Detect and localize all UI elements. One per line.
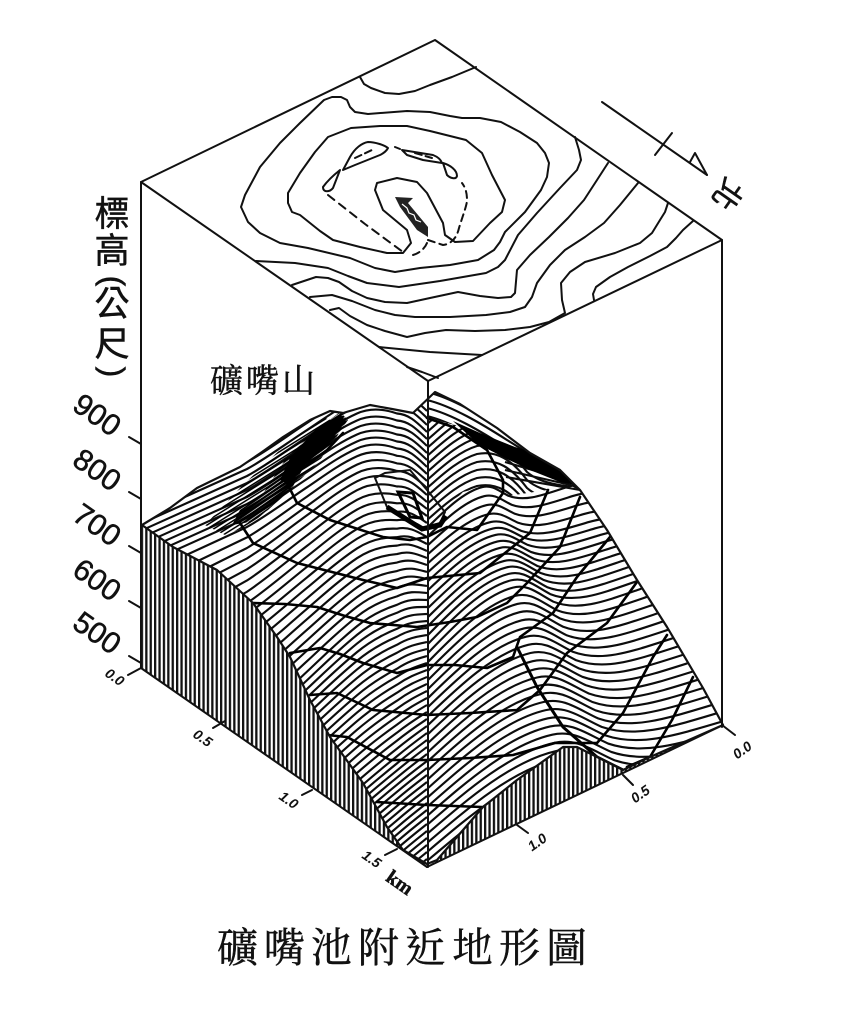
elevation axis title: ): [95, 367, 131, 377]
map contour lines: [241, 67, 693, 378]
base axis labels: 0.5: [628, 782, 653, 806]
figure: terrain block diagram: [74, 39, 751, 966]
elevation axis ticks: [129, 437, 141, 663]
base axis labels: 0.0: [730, 738, 755, 762]
base axis labels: km: [382, 866, 417, 900]
thick index contours: [240, 418, 693, 807]
elevation axis title: 高: [94, 232, 130, 271]
elevation axis title: 標: [94, 195, 130, 234]
mountain name label: 礦嘴山: [210, 363, 318, 400]
elevation axis labels: 900: [67, 388, 127, 443]
elevation axis title: [94, 195, 131, 377]
north arrow: 北: [704, 172, 749, 215]
base axis labels: 1.0: [525, 830, 550, 854]
plate outline: [141, 40, 722, 381]
surface silhouette: [142, 392, 723, 864]
elevation axis labels: 600: [67, 553, 127, 608]
base axis labels: 0.5: [190, 726, 216, 750]
right slope hatch lines: [429, 393, 721, 861]
elevation axis title: 公: [94, 285, 130, 324]
dense horizontal hatching below east ridge: [504, 461, 580, 491]
base axis labels: [102, 665, 755, 900]
crater summit: [375, 470, 446, 529]
panel: left wall hatching: [141, 525, 427, 867]
crater lake: [395, 197, 428, 237]
chart: hatched terrain surface: [127, 393, 721, 862]
elevation axis labels: 700: [67, 498, 127, 553]
apex hatch above the dark ridge: [429, 393, 524, 450]
dark ridge shading: [205, 412, 623, 770]
base axis labels: 0.0: [102, 665, 128, 689]
base axis labels: 1.5: [359, 847, 385, 871]
elevation axis title: (: [95, 276, 131, 287]
figure title: 礦嘴池附近地形圖: [217, 925, 593, 971]
crater rim outcrops and dashed rim: [323, 142, 467, 255]
box edges back: [141, 182, 722, 727]
arcs east of the crater: [429, 420, 577, 520]
elevation axis title: 尺: [94, 325, 130, 364]
box edges front: [141, 381, 723, 867]
north arrow: [602, 102, 749, 215]
elevation axis labels: 500: [67, 606, 127, 661]
base axis ticks: [128, 668, 735, 855]
base axis labels: 1.0: [276, 788, 302, 812]
panel: top contour map: [141, 40, 722, 381]
panel: right wall hatching: [427, 725, 723, 867]
left slope hatch lines: [146, 405, 427, 862]
elevation axis labels: 800: [67, 443, 127, 498]
elevation axis labels: [67, 388, 127, 661]
